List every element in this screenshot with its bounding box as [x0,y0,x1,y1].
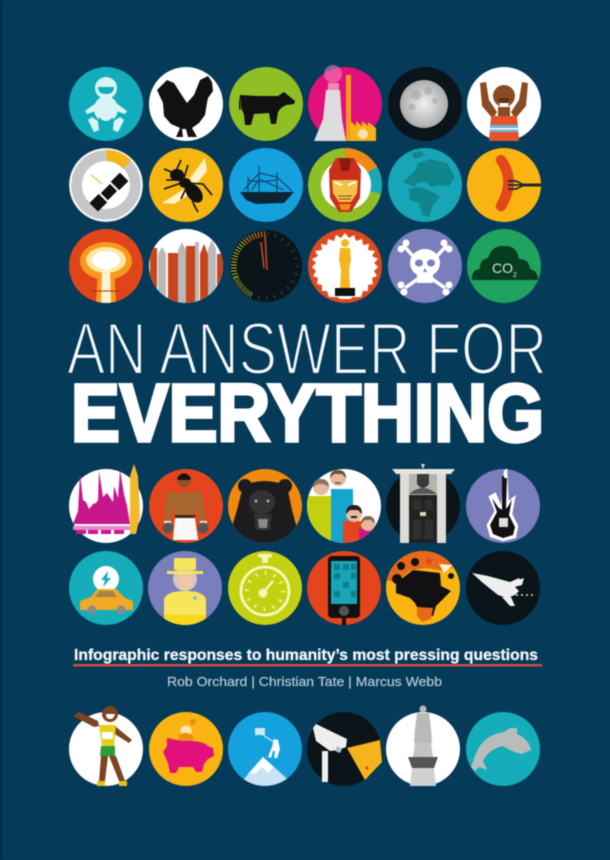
icon: CCTV camera [307,712,382,786]
icon row 2 [69,148,541,222]
icon: skull and crossbones [388,229,462,303]
icon: CO2 cloud [467,229,541,303]
title [67,309,547,459]
icon: satellite [69,148,143,222]
tagline text: Infographic responses to humanity’s most pressing questions [74,647,538,664]
icon: moon [388,67,462,141]
icon: stopwatch [228,551,302,625]
authors: Rob Orchard | Christian Tate | Marcus Webb [167,674,442,689]
icon: Africa map [386,551,460,625]
icon: sausage on fork [467,148,541,222]
icon: Oscar statuette [308,229,382,303]
icon row 5 [69,551,540,625]
icon: 10 Downing Street door [386,464,460,543]
icon: athlete arms raised [467,67,541,141]
icon: bear [227,469,302,543]
icon row 1 [69,65,541,141]
tagline underline [73,664,542,666]
icon: sprinter pose [69,706,143,786]
icon: spiked area chart [69,464,143,543]
icon: skyscrapers [149,229,224,303]
icon: mushroom cloud [69,229,143,303]
icon: smartphone [307,551,381,625]
icon: baby [69,67,143,141]
icon: nuclear power station [308,65,382,141]
icon: dolphin [466,712,540,786]
icon row 3 [69,229,541,303]
icon: doomsday clock [230,230,302,302]
icon: piggy bank [149,712,223,786]
icon: the Queen [148,551,222,625]
icon: CO2 cloud: 2 [513,272,517,279]
title line: EVERYTHING: EVERYTHING [71,368,544,459]
icon: Nelson's Column [386,706,460,786]
icon: four band members [307,469,381,547]
icon: Iron Man helmet [308,148,382,222]
icon: electric car [69,551,143,625]
icon row 4 [69,464,540,547]
icon: sailing ship [229,148,303,222]
icon: cow [229,67,303,141]
icon: CO2 cloud: CO [492,260,513,276]
icon: insect [149,148,223,222]
icon: globe [388,148,462,222]
icon row 6 [69,706,540,786]
icon: rocket [466,551,540,625]
icon: mountain climber [228,712,302,786]
icon: chicken [149,67,223,141]
icon: boxer [149,469,223,543]
icon: bass guitar [466,469,540,543]
